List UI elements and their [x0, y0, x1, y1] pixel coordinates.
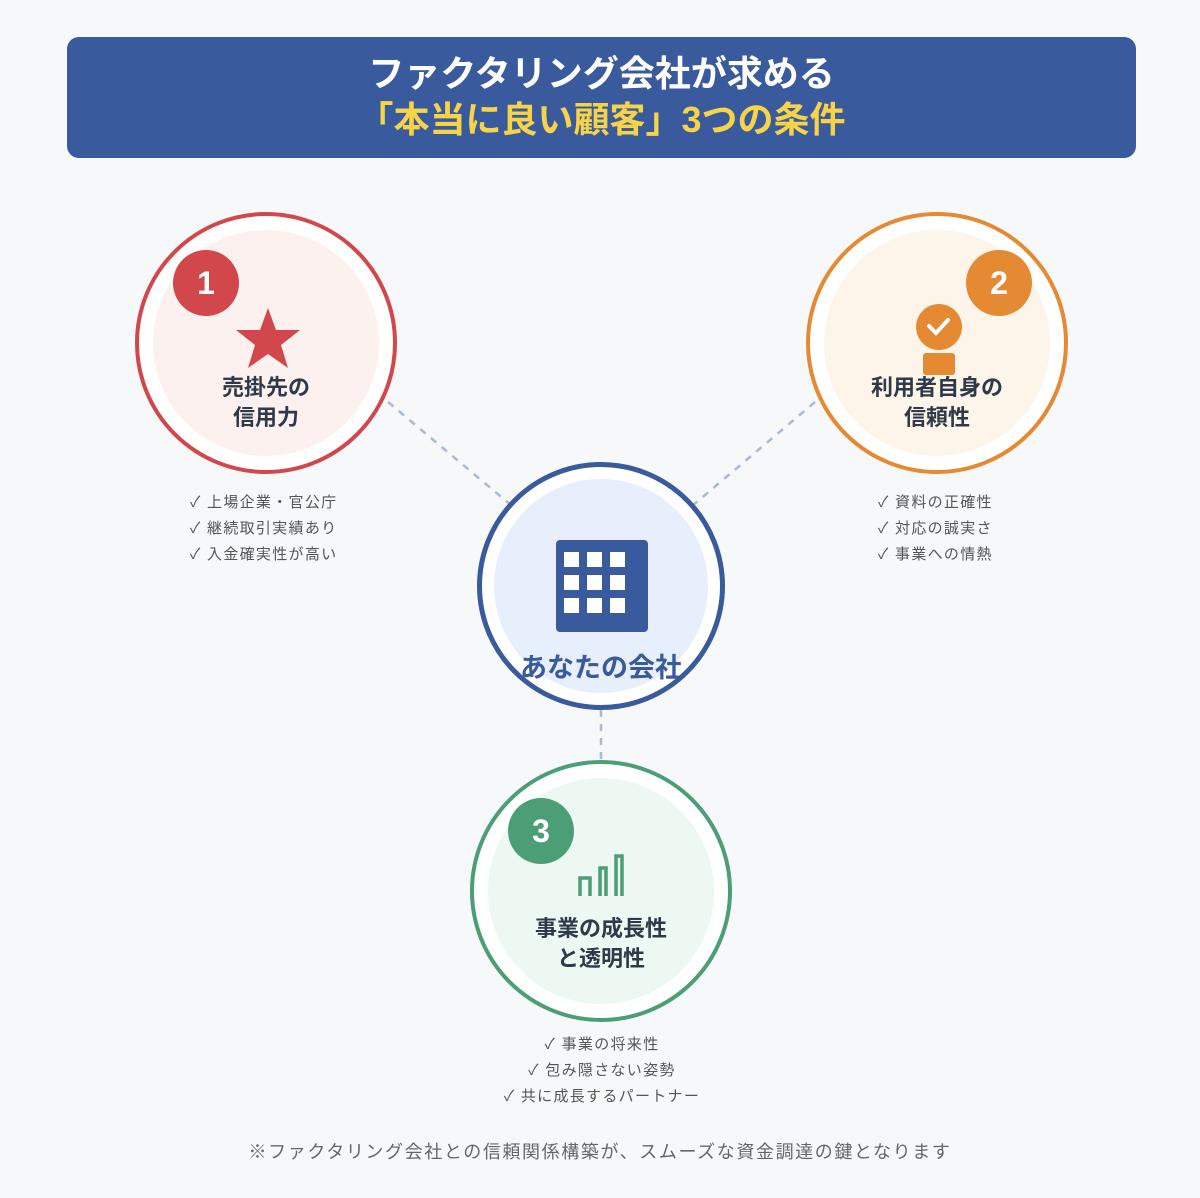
list 3: ✓ 包み隠さない姿勢	[528, 1062, 676, 1079]
badge 2	[966, 250, 1032, 316]
badge 1	[173, 250, 239, 316]
list 1: ✓ 上場企業・官公庁	[190, 494, 337, 511]
footer note: ※ファクタリング会社との信頼関係構築が、スムーズな資金調達の鍵となります	[249, 1142, 951, 1162]
label 3: 事業の成長性	[535, 916, 667, 941]
badge 2: 2	[990, 265, 1008, 301]
list 3: ✓ 共に成長するパートナー	[504, 1088, 700, 1105]
badge 3: 3	[532, 813, 550, 849]
label 2	[871, 375, 1003, 430]
panel: condition 2	[806, 212, 1068, 474]
panel: condition 1	[135, 212, 397, 474]
label 1: 売掛先の	[222, 375, 310, 400]
label 2: 利用者自身の	[871, 375, 1003, 400]
list 3	[504, 1036, 700, 1105]
title: ファクタリング会社が求める	[368, 53, 835, 94]
title	[67, 37, 1136, 158]
panel: center company	[477, 462, 725, 710]
label 2: 信頼性	[904, 405, 970, 430]
icon: growth	[578, 854, 624, 896]
list 2: ✓ 対応の誠実さ	[878, 520, 993, 537]
list 1: ✓ 継続取引実績あり	[190, 520, 337, 537]
list 1: ✓ 入金確実性が高い	[190, 546, 337, 563]
label 1	[222, 375, 310, 430]
icon: person with check	[916, 304, 962, 375]
list 3: ✓ 事業の将来性	[545, 1036, 659, 1053]
label 1: 信用力	[233, 405, 299, 430]
badge 1: 1	[197, 265, 215, 301]
title: 「本当に良い顧客」3つの条件	[357, 99, 846, 140]
list 2	[878, 494, 993, 563]
list 2: ✓ 資料の正確性	[878, 494, 993, 511]
list 2: ✓ 事業への情熱	[878, 546, 993, 563]
label center: あなたの会社	[520, 653, 682, 683]
label 3: と透明性	[557, 946, 645, 971]
panel: condition 3	[470, 760, 732, 1022]
icon: building	[556, 540, 648, 632]
list 1	[190, 494, 337, 563]
icon: star	[236, 308, 300, 368]
badge 3	[508, 798, 574, 864]
label 3	[535, 916, 667, 971]
